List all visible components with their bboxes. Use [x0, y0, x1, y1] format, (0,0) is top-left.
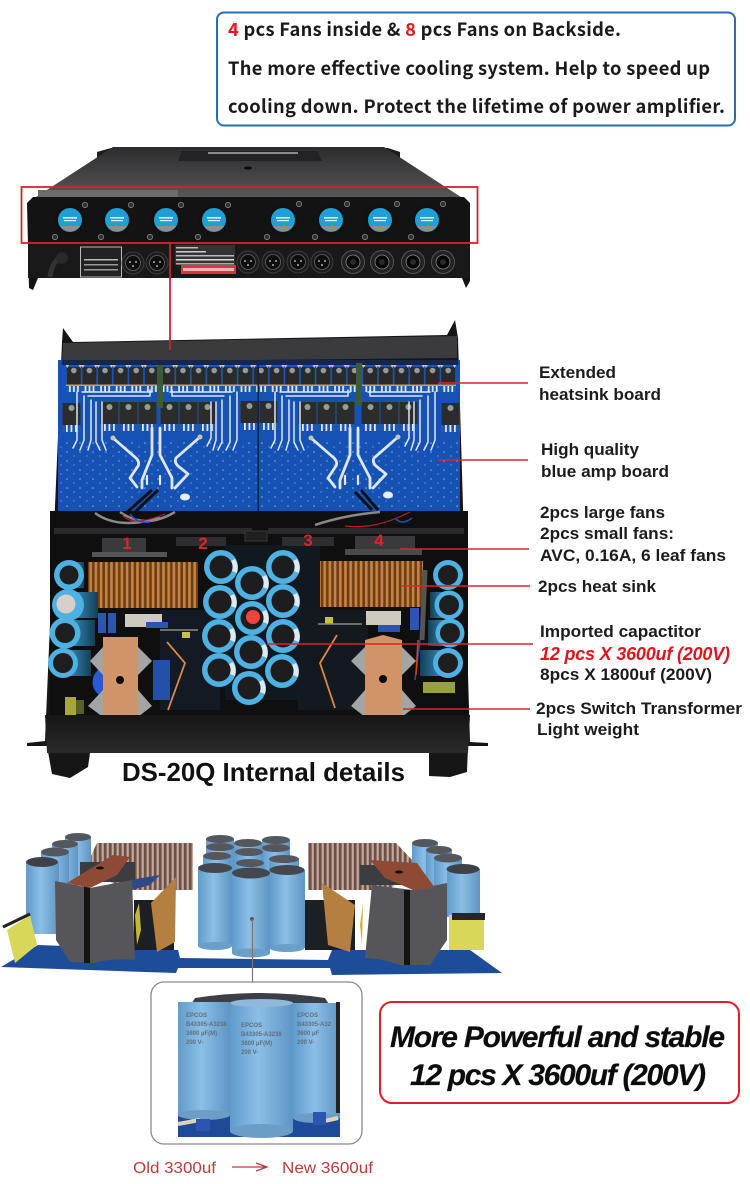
lower chassis interior — [45, 511, 470, 753]
label: capacitors: Imported capactitor — [540, 623, 702, 641]
capacitor markings — [186, 1013, 332, 1056]
highlight: red frame around fans — [22, 187, 478, 243]
left transformer — [55, 855, 135, 963]
label: extended heatsink board: heatsink board — [539, 386, 661, 404]
fan number 2: 2 — [198, 534, 208, 553]
blue amp board — [58, 360, 460, 514]
label: capacitors: 12 pcs X 3600uf (200V) — [540, 644, 730, 664]
arrow — [232, 1163, 267, 1171]
yellow transformers — [3, 913, 485, 963]
capacitor markings: B43305-A3238 — [186, 1022, 227, 1028]
capacitor markings: EPCOS — [241, 1023, 262, 1029]
capacitor markings: B43305-A3238 — [241, 1032, 282, 1038]
right transformer — [365, 860, 447, 965]
label: fans — [540, 504, 726, 565]
capacitor markings: EPCOS — [297, 1013, 318, 1019]
rear capacitors — [26, 833, 480, 934]
connector dot and line to zoom view — [250, 917, 254, 982]
label: blue amp board: blue amp board — [541, 463, 669, 481]
heading: internal details: DS-20Q Internal details — [122, 757, 405, 787]
label: blue amp board — [541, 441, 669, 481]
label: extended heatsink board: Extended — [539, 364, 616, 382]
fan number 3: 3 — [303, 531, 313, 550]
capacitor markings: B43305-A32 — [297, 1022, 332, 1028]
small components — [65, 608, 455, 717]
amplifier rear view — [22, 147, 478, 290]
capacitor markings: 3600 µF — [297, 1031, 319, 1037]
caption: old to new capacitance: Old 3300uf — [133, 1160, 217, 1177]
heat sinks — [88, 561, 423, 608]
zoom view: capacitors — [151, 982, 362, 1144]
label: capacitors: 8pcs X 1800uf (200V) — [540, 666, 712, 684]
connector: red line from fan frame to internal view — [169, 243, 171, 350]
label: heat sink: 2pcs heat sink — [538, 578, 657, 596]
centre capacitors — [202, 550, 300, 705]
label: extended heatsink board — [539, 364, 661, 404]
amplifier internal top view — [27, 320, 488, 778]
capacitor markings: 3600 µF(M) — [241, 1041, 272, 1047]
label: switch transformer: 2pcs Switch Transformer — [536, 700, 743, 718]
text: cooling system: The more effective cooling system. Help to speed up — [228, 55, 710, 81]
red marker dot — [246, 610, 260, 624]
callout lines — [267, 383, 533, 709]
caption: old to new capacitance: New 3600uf — [282, 1160, 374, 1177]
caption: old to new capacitance — [133, 1160, 374, 1177]
transformers — [88, 635, 416, 717]
front capacitors — [198, 863, 305, 958]
callout line 2: 12 pcs X 3600uf (200V) — [410, 1059, 706, 1092]
callout line 1: More Powerful and stable — [390, 1021, 725, 1054]
capacitor markings: 3600 µF(M) — [186, 1031, 217, 1037]
label: blue amp board: High quality — [541, 441, 640, 459]
capacitor markings: 200 V- — [241, 1050, 258, 1056]
capacitor markings: EPCOS — [186, 1013, 207, 1019]
side capacitors — [48, 560, 464, 678]
text: lifetime: cooling down. Protect the lifetime of power amplifier. — [228, 93, 725, 119]
dark pcb components — [80, 862, 410, 950]
label: fans: 2pcs small fans: — [540, 525, 674, 543]
fans — [92, 531, 422, 557]
rear connectors — [50, 245, 454, 277]
callout: more powerful — [380, 1002, 739, 1103]
panel: fans description — [217, 12, 735, 126]
fans row — [52, 201, 446, 240]
label: switch transformer — [536, 700, 743, 739]
label: fans: 2pcs large fans — [540, 504, 665, 522]
capacitor markings: 200 V- — [186, 1040, 203, 1046]
fan number 1: 1 — [122, 534, 132, 553]
label: capacitors — [540, 623, 730, 684]
heat sink fins — [88, 843, 414, 890]
power board photo — [1, 833, 502, 982]
label: fans: AVC, 0.16A, 6 leaf fans — [540, 547, 726, 565]
copper shields — [151, 877, 355, 952]
text: fan counts: 4 pcs Fans inside & 8 pcs Fans on Backside. — [228, 16, 621, 42]
label: switch transformer: Light weight — [537, 721, 640, 739]
fan number 4: 4 — [374, 531, 384, 550]
capacitor markings: 200 V- — [297, 1040, 314, 1046]
